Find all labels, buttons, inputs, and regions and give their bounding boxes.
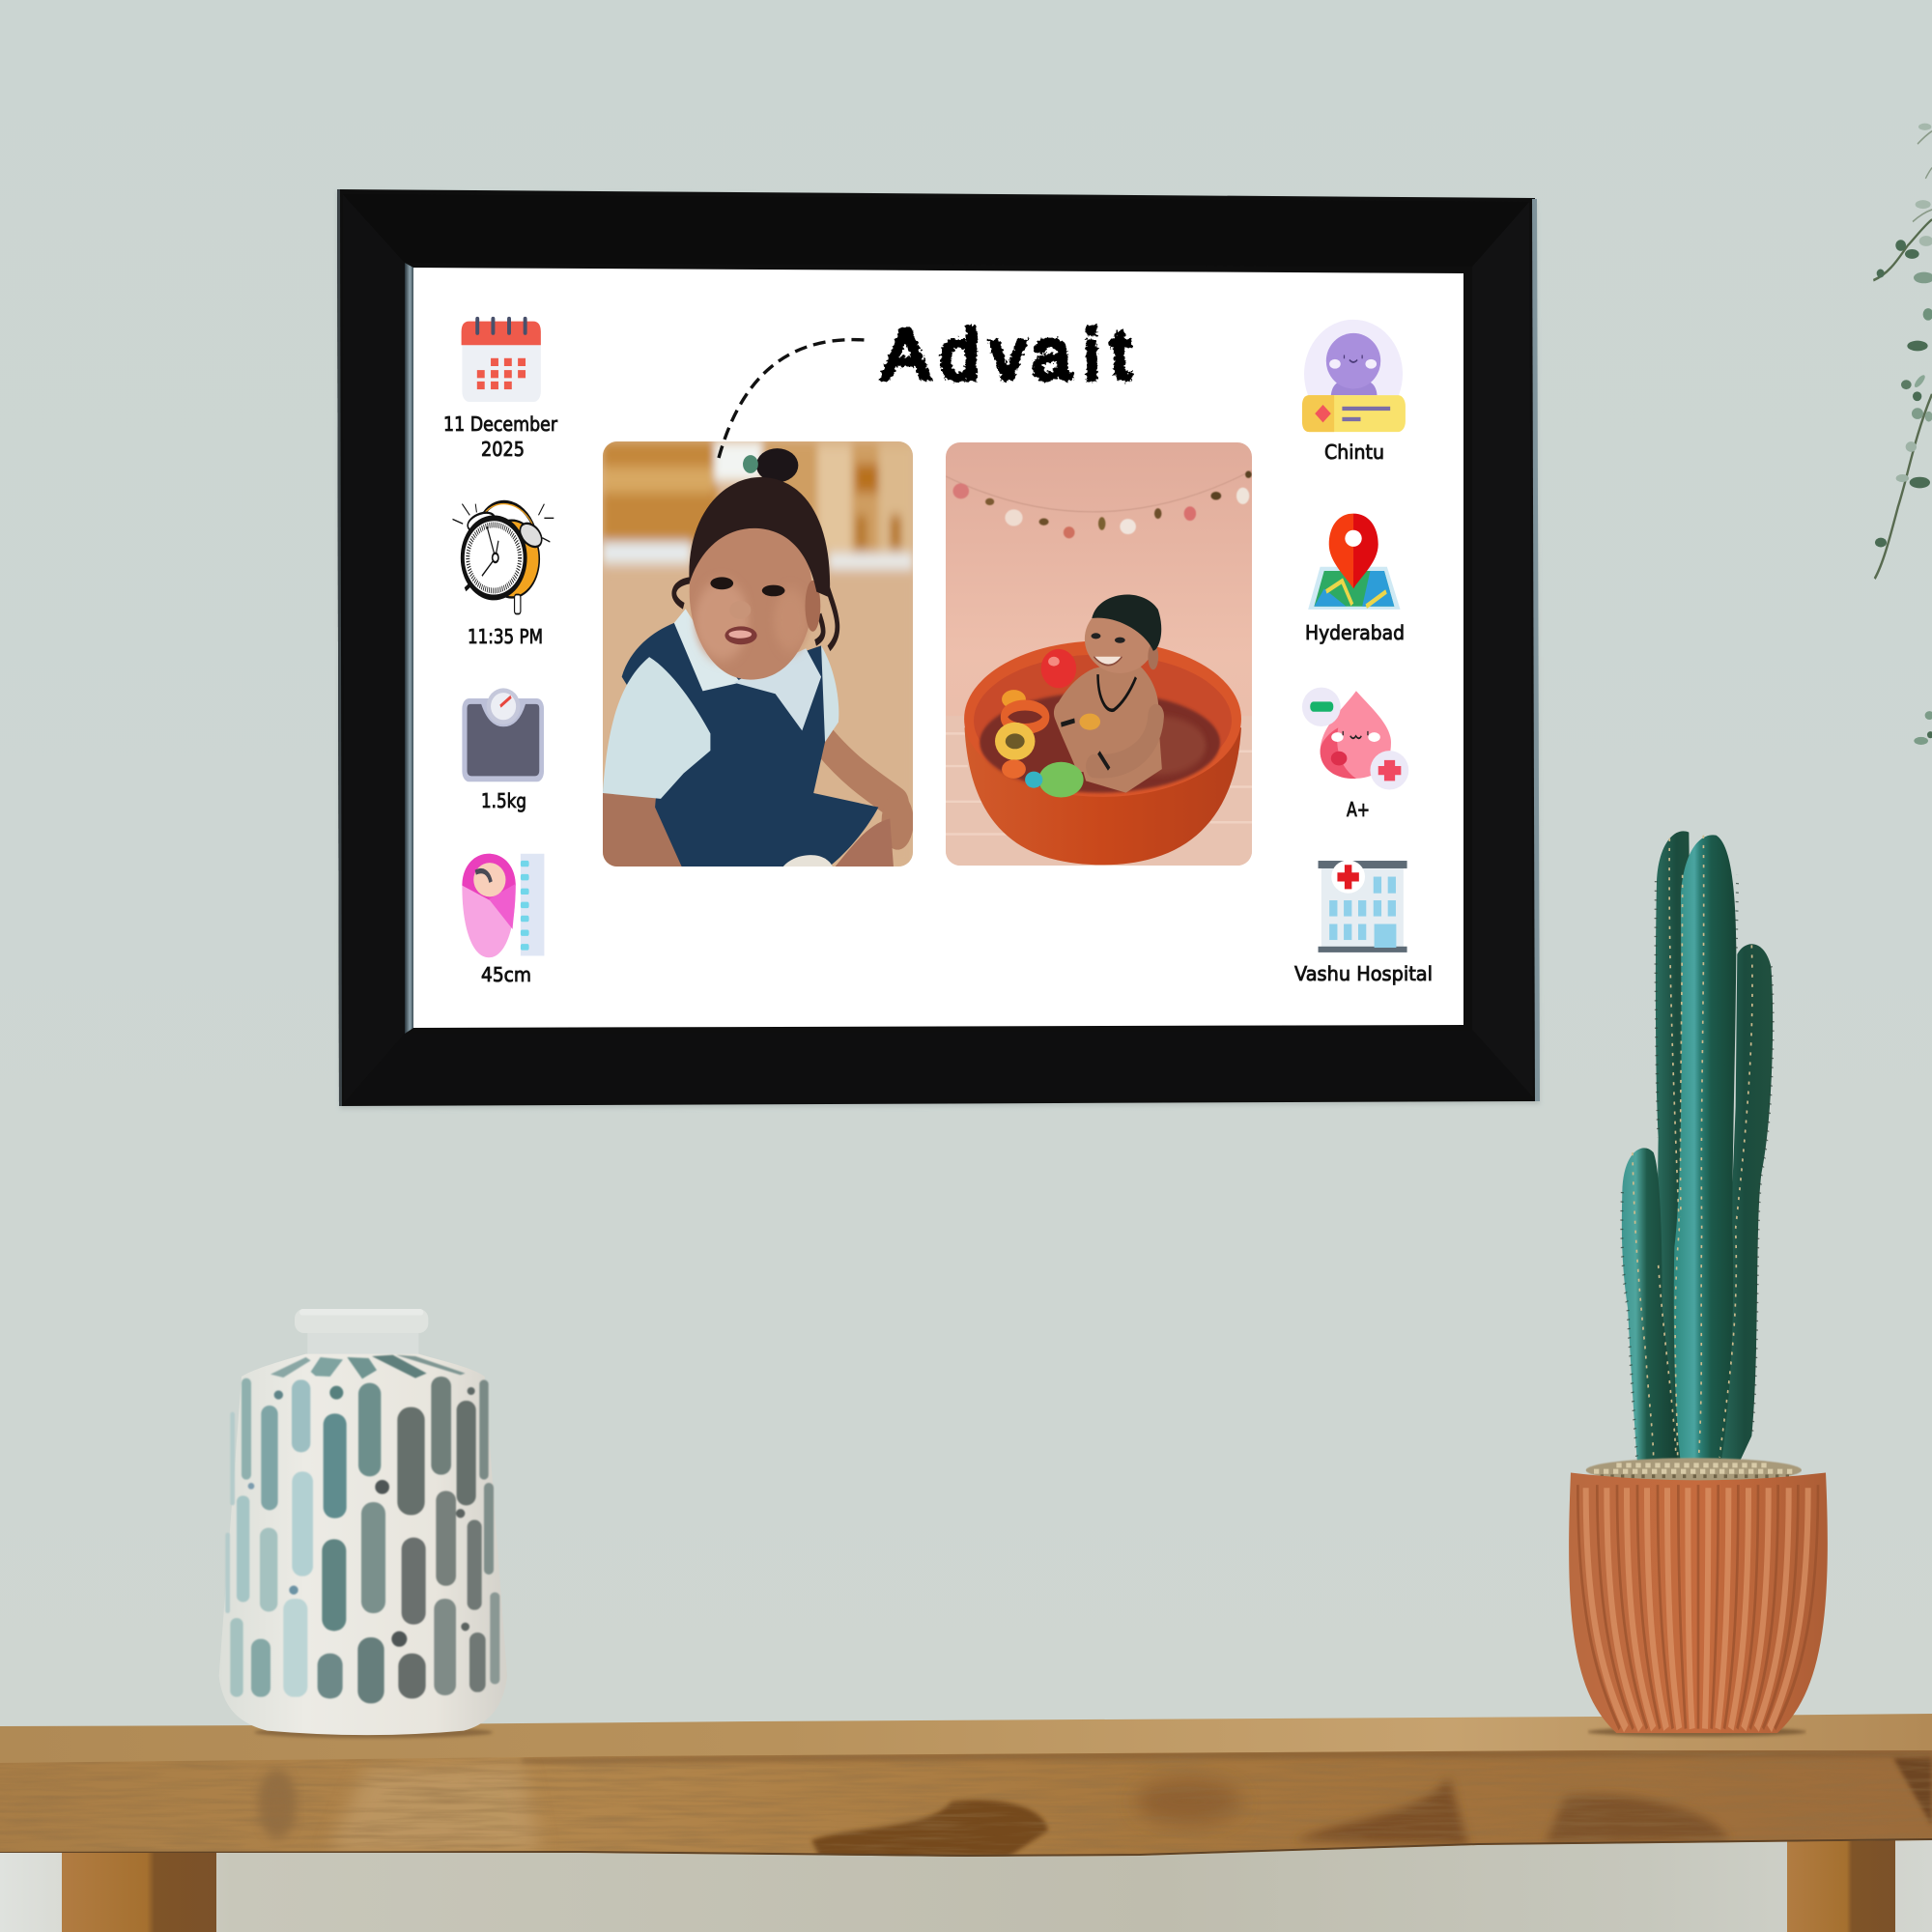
pebbles <box>1586 1458 1802 1483</box>
label: place: Hyderabad <box>1305 621 1405 644</box>
label: nickname: Chintu <box>1324 440 1384 464</box>
vase contact shadow <box>254 1726 493 1738</box>
baby overalls <box>622 623 878 867</box>
icon: blood drop <box>1302 688 1408 790</box>
vase neck and lip <box>295 1309 428 1362</box>
pot contact shadow <box>1587 1727 1806 1737</box>
photo 2: baby in orange tub <box>946 442 1252 869</box>
right column icons <box>1302 320 1408 952</box>
label: hospital: Vashu Hospital <box>1294 962 1433 985</box>
baby torso <box>1054 660 1162 793</box>
icon: hospital building <box>1319 860 1407 952</box>
wooden shelf <box>0 1714 1932 1860</box>
bunting garland <box>946 470 1252 538</box>
baby bun <box>674 448 838 648</box>
terracotta pot <box>1569 1472 1828 1733</box>
baby face <box>690 518 820 680</box>
frame silver outer edge <box>1532 199 1540 1101</box>
icon: alarm clock <box>453 502 554 614</box>
baby hair <box>689 477 830 597</box>
shelf legs <box>62 1831 1895 1932</box>
frame soft shadow <box>337 191 1540 1109</box>
label: time: 11:35 PM <box>468 625 543 648</box>
vase brush strokes <box>225 1355 499 1703</box>
tub <box>965 727 1241 865</box>
title: Advait: Advait <box>882 316 1130 394</box>
label: weight: 1.5kg <box>481 789 526 812</box>
icon: map location pin <box>1308 514 1401 610</box>
label: length: 45cm <box>481 963 531 986</box>
icon: weighing scale <box>462 688 544 781</box>
floor tiles <box>946 732 1252 866</box>
dashed connector curve <box>719 340 865 458</box>
bath toys <box>995 690 1100 798</box>
baby shirt <box>603 657 710 799</box>
icon: swaddled baby and ruler <box>462 854 544 957</box>
wall under shelf <box>0 1840 1932 1932</box>
white print <box>413 268 1463 1028</box>
picture frame <box>337 189 1540 1109</box>
baby head <box>1085 594 1161 673</box>
ceramic vase <box>219 1309 507 1738</box>
hanging plant <box>1873 124 1932 745</box>
frame moulding <box>337 189 1538 1106</box>
vase body <box>219 1354 507 1735</box>
cactus in terracotta pot <box>1569 831 1828 1737</box>
red ball <box>1041 649 1076 688</box>
label: date: 11 December <box>443 412 557 436</box>
baby arms <box>825 742 897 805</box>
icon: name badge with purple character <box>1302 320 1406 432</box>
photo 1: baby in navy overalls <box>603 441 914 869</box>
shelf front face <box>0 1750 1932 1857</box>
label: blood group: A+ <box>1347 798 1370 821</box>
icon: calendar <box>462 317 541 402</box>
frame inner lip <box>405 263 413 1034</box>
label: year: 2025 <box>481 438 525 461</box>
shelf top surface <box>0 1714 1932 1768</box>
left column icons <box>453 317 554 957</box>
cactus stems <box>1622 831 1773 1463</box>
